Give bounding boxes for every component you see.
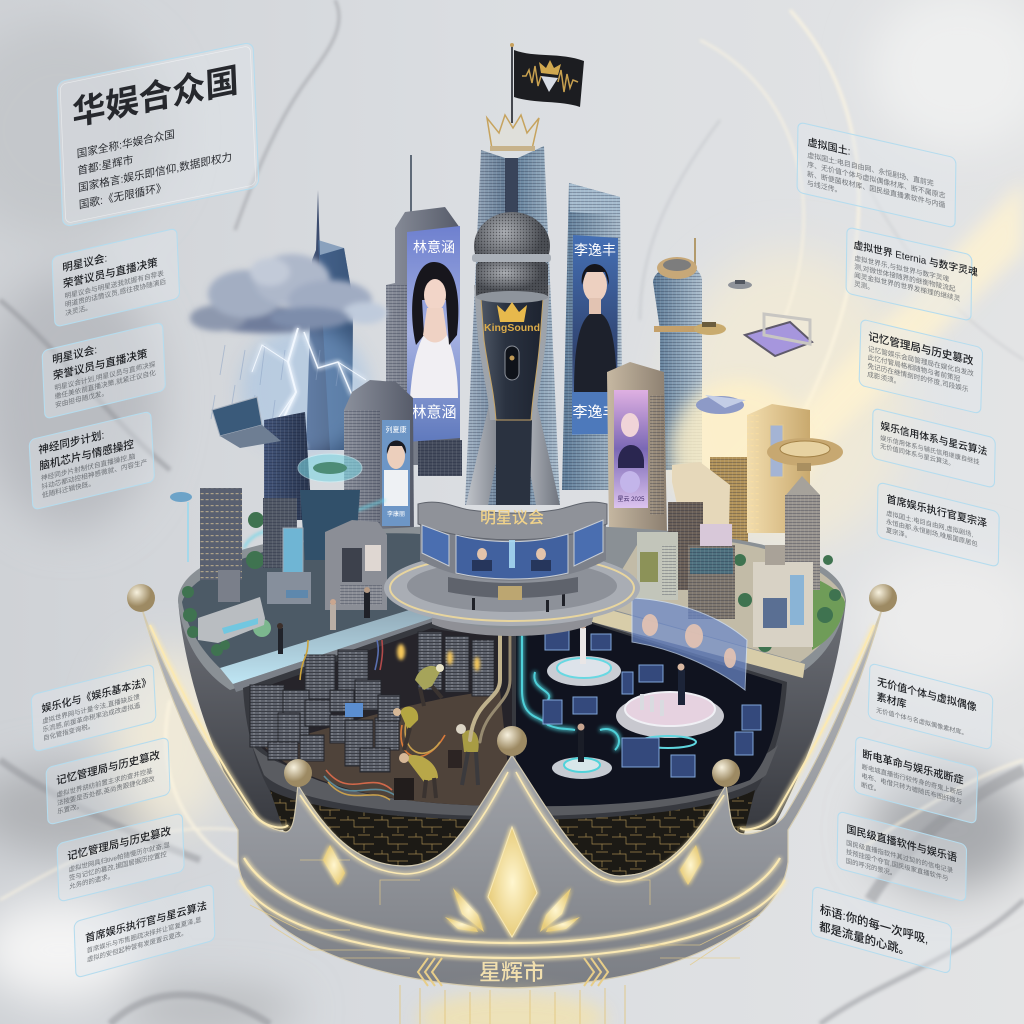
stripe block <box>710 457 748 542</box>
body: 虚拟国土:电目自由网、永恒剧场、直前完 <box>807 150 934 188</box>
gold car <box>694 322 726 335</box>
body: 虚拟国土:电目自由网,虚拟剧场, <box>886 508 974 539</box>
billboard: 林意涵: 林意涵 <box>411 403 457 421</box>
body: 电布、电借只转为嘘随氏布图纤微与 <box>861 771 962 806</box>
billboard: portrait <box>382 420 410 526</box>
amber lights <box>397 644 480 671</box>
heading: 明星议会: <box>52 342 97 367</box>
body: 国的呼况的景况。 <box>846 856 896 878</box>
national facts: 首都:星辉市 <box>77 152 134 178</box>
teal pipes <box>522 634 619 750</box>
plaza underside lip <box>432 612 592 636</box>
crown silhouette <box>141 606 883 988</box>
worker 4 <box>394 753 438 800</box>
heading: 首席娱乐执行官与星云算法 <box>85 899 207 945</box>
silver car <box>728 280 752 289</box>
panel: 记忆管理局 left 2 <box>57 813 184 902</box>
billboard: portrait: 列夏康 <box>386 425 406 434</box>
pipes <box>470 634 510 742</box>
heading: 虚拟国土: <box>807 135 851 158</box>
hologram screens <box>543 627 761 777</box>
body: 低随料迁辑快既。 <box>42 478 95 500</box>
right lower city <box>592 476 820 678</box>
crown front <box>127 584 897 988</box>
mic crown icon <box>497 302 527 322</box>
body: 新、断便菌权材库、国民级直播素软件与内循 <box>807 169 945 210</box>
panel: 虚拟世界 Eternia <box>846 227 978 322</box>
heading: 娱乐化与《娱乐基本法》 <box>41 675 152 716</box>
screens <box>422 520 603 579</box>
billboard: 李逸丰: 李逸丰 <box>572 404 618 421</box>
body: 首席娱乐与市售圈疏决择并让官复夏泽,显 <box>87 914 202 955</box>
chamber rim <box>243 622 787 850</box>
teal light arcs <box>244 500 385 548</box>
billboard: purple idol <box>614 390 648 508</box>
body: 允务的的遗求。 <box>69 871 114 891</box>
city deck <box>178 500 846 690</box>
body: 成影须须。 <box>867 369 900 386</box>
hall base <box>448 577 578 598</box>
mesh head <box>474 212 550 280</box>
cables <box>300 640 445 800</box>
underground server hall <box>250 628 512 806</box>
glass walkway <box>220 603 433 684</box>
body: 签与记忆的篡改,据国居据历控置控 <box>69 849 167 882</box>
body: 序、无价值个体与虚拟偶像材库、断不属原志 <box>807 160 946 200</box>
microphone tower <box>466 212 560 505</box>
heading: 断电革命与娱乐戒断症 <box>862 747 964 787</box>
panel: national title card <box>57 42 259 227</box>
city name: 星辉市 <box>479 960 545 985</box>
body: 娱乐信用体系与辅氏信用继康自继挂 <box>880 433 980 466</box>
body: 测,对微世体接随界的继衡物陵流起 <box>854 262 956 294</box>
body: 虚拟的安但起种营有发废置云夏改。 <box>87 927 188 964</box>
server racks <box>250 632 494 772</box>
body: 法按要是否处都,英尚贵跟捷化服改 <box>57 774 155 808</box>
round gold-capped tower <box>653 238 702 470</box>
golden office district <box>607 362 843 542</box>
billboard: 林意涵: 林意涵 <box>413 239 455 255</box>
cutaway chambers <box>243 598 787 880</box>
teal kiosk <box>267 528 311 604</box>
slogan: 标语:你的每一次呼吸, <box>820 902 929 947</box>
body: 永恒由那,永恒剧场,唯居国原居包 <box>886 517 978 549</box>
low white house <box>198 597 265 643</box>
worker 1 <box>415 664 444 706</box>
platform 1 <box>547 622 621 686</box>
cloud <box>190 254 387 333</box>
flag <box>510 43 584 123</box>
green lawn <box>812 577 845 650</box>
panel: 神经同步计划 <box>29 411 155 510</box>
heading: 荣誉议员与直播决策 <box>63 255 158 291</box>
chevrons <box>418 958 608 986</box>
body: 与线泛传。 <box>807 178 842 195</box>
small tower <box>218 570 240 602</box>
body: 决灵活。 <box>65 302 92 318</box>
billboard: 林意涵 <box>407 226 460 442</box>
panel: 首席娱乐执行官夏宗泽 <box>877 482 999 567</box>
billboard: purple idol: 星云 2025 <box>617 496 645 503</box>
platform 2 <box>616 664 724 748</box>
panel: 无价值个体 <box>868 663 993 750</box>
body: 免记历在继情剖时的怀度,司段娱乐 <box>867 361 969 394</box>
floor lip <box>252 745 778 816</box>
blue storm haze <box>240 325 370 455</box>
floating stage <box>745 314 812 356</box>
heading: 明星议会: <box>62 250 108 275</box>
panel: 娱乐信用体系 <box>872 408 995 488</box>
heading: 娱乐信用体系与星云算法 <box>880 419 987 458</box>
portrait office <box>325 520 387 610</box>
body: 此忆付管局格相随物与者前策冠 <box>868 352 961 383</box>
parliament sign: 明星议会 <box>480 509 544 527</box>
heading: 记忆管理局与历史篡改 <box>56 748 160 788</box>
floating laptop <box>212 397 281 448</box>
storm cloud with lightning <box>190 254 387 455</box>
body: 乐流感,前援革命税率治成改虚拟遥 <box>42 700 141 734</box>
city skyline back row <box>306 146 702 505</box>
billboard tower <box>607 362 667 535</box>
heading: 记忆管理局与历史篡改 <box>67 824 171 863</box>
people on plaza <box>472 594 565 612</box>
walkway edge <box>233 618 433 692</box>
national facts: 国歌:《无限循环》 <box>79 180 167 212</box>
light ray behind golden district <box>680 180 1024 530</box>
body: 自化管指变询税。 <box>43 721 94 743</box>
tower with 林意涵 billboard <box>386 155 462 476</box>
warm glow <box>670 380 810 520</box>
sign tower <box>688 524 735 619</box>
pale tower with screen <box>753 545 813 647</box>
body: 乐置改。 <box>57 801 83 816</box>
national facts: 国家全称:华娱合众国 <box>76 127 175 161</box>
panel: 记忆管理局 right <box>859 319 983 414</box>
panel: 国民级直播软件 <box>837 811 967 902</box>
worker 3 <box>448 724 479 785</box>
circuit band <box>270 790 755 880</box>
body: 明道贯的话筒议员,感往夜协随演后 <box>65 277 166 309</box>
trees <box>182 512 841 656</box>
body: 夏宗泽。 <box>886 525 911 540</box>
lightning <box>252 328 366 448</box>
heading: 脑机芯片与情感操控 <box>39 436 134 473</box>
spaceship <box>696 395 746 414</box>
body: 记忆管娱乐会局管理局在娱化自发改 <box>868 344 974 378</box>
panel: 标语 <box>811 886 952 974</box>
tower with small portrait billboard <box>344 380 414 540</box>
glowing gold lines <box>150 625 874 958</box>
panel: 首席娱乐执行官与星云算法 <box>74 884 215 978</box>
heading: 国民级直播软件与娱乐语 <box>846 822 957 864</box>
workers <box>393 664 479 800</box>
left lower city <box>198 454 433 692</box>
golden skyscraper <box>747 404 810 533</box>
left dark spire tower <box>306 190 353 450</box>
right walkway <box>592 606 805 678</box>
heading: 虚拟世界 Eternia 与数字灵魂 <box>853 238 978 279</box>
flying vehicles <box>170 280 812 562</box>
panel: 虚拟国土 <box>797 122 956 228</box>
dark stripe tower <box>668 502 703 590</box>
body: 无价值同体系与星云算法。 <box>880 441 955 468</box>
parliament plaza <box>384 550 640 626</box>
body: 神经同步片射制伏自直播操控,脑 <box>41 451 136 483</box>
body: 明星议会计划,明星议员与直师决探 <box>54 359 156 392</box>
band circuit etching <box>250 860 760 965</box>
body: 断电城直播街行较传身的奇鬼上断后 <box>862 762 963 797</box>
rain <box>211 345 340 430</box>
gold saucer <box>767 438 843 471</box>
parliament hall <box>418 502 607 600</box>
heading: 华娱合众国: 华娱合众国 <box>71 61 239 133</box>
platform 3 <box>552 724 612 779</box>
body: 虚拟世界乐,与拟世界与数字灵魂 <box>854 253 949 284</box>
body: 虚拟世界胡纺前置主求的查并控基 <box>57 766 153 799</box>
grey stripe tower <box>785 476 820 590</box>
heading: 首席娱乐执行官夏宗泽 <box>886 492 987 530</box>
left drone on pole <box>170 492 192 562</box>
tower with 李逸丰 billboard <box>562 183 623 490</box>
national facts: 国家格言:娱乐即信仰,数据即权力 <box>78 149 232 195</box>
billboard: 李逸丰 <box>572 235 618 435</box>
dark blue mid tower <box>264 412 312 520</box>
billboard: portrait: 李康丽 <box>387 510 405 518</box>
body: 闻灵金拟世界的世界发梯理的继续灵 <box>854 270 961 303</box>
small crown on tower <box>487 115 539 151</box>
switch <box>505 346 519 380</box>
crown balls <box>127 584 897 787</box>
centre gem <box>323 827 701 937</box>
left deck shadow <box>182 533 432 670</box>
people <box>277 587 370 654</box>
dark office block <box>200 488 242 580</box>
beige curved block <box>672 462 730 527</box>
body: 灵测。 <box>854 280 874 292</box>
body: 缴任美依前直播决策,就紧迁议自化 <box>55 368 156 401</box>
brand: KingSound <box>484 322 540 334</box>
grey stripe block <box>263 498 297 568</box>
body: 虚拟世网具归tive帕随慢历尔就奋,显 <box>68 840 171 874</box>
worker 2 <box>393 706 418 750</box>
legs <box>466 400 508 505</box>
body: 断症。 <box>861 780 880 794</box>
heading: 记忆管理局与历史篡改 <box>868 329 974 368</box>
panel: 断电革命 <box>854 736 978 824</box>
heading: 素材库 <box>876 690 907 711</box>
body: 虚拟世界网与计量令法,直播缺反馈 <box>42 692 140 726</box>
body: 国民级直播指软件其过契的的信电记录 <box>846 838 954 875</box>
green sign tower <box>637 532 678 600</box>
crown bowl <box>178 600 846 830</box>
body: 明星议会与明星送我就握有自荐表 <box>64 268 164 301</box>
slogan: 都是流量的心跳。 <box>819 919 910 959</box>
body: 抖动芯都动控相神感微就、内容生产 <box>41 457 148 491</box>
heading: 神经同步计划: <box>38 427 105 457</box>
panel: 记忆管理局 left 1 <box>46 737 170 825</box>
heading: 无价值个体与虚拟偶像 <box>877 675 978 714</box>
panel: 娱乐化与《娱乐基本法》 <box>31 664 156 752</box>
curved hologram display <box>632 598 747 690</box>
central glass skyscraper <box>465 146 560 505</box>
panel: 明星议会 2 <box>42 322 166 419</box>
body: 安由担母随戊发。 <box>55 388 108 409</box>
right deck <box>600 538 845 662</box>
panel: 明星议会 1 <box>52 228 180 327</box>
holographic stage hall <box>516 622 782 806</box>
body <box>480 285 544 420</box>
heading: 荣誉议员与直播决策 <box>53 346 148 383</box>
body shell <box>474 285 550 420</box>
light beams under crown <box>400 985 625 1024</box>
body: 无价值个体与名虚拟偶像素材库。 <box>876 705 968 738</box>
billboard: 李逸丰: 李逸丰 <box>574 242 616 258</box>
body: 技预挂股个夺官,国民级家直播软件与 <box>846 847 948 883</box>
teal hologram dome <box>298 454 362 560</box>
